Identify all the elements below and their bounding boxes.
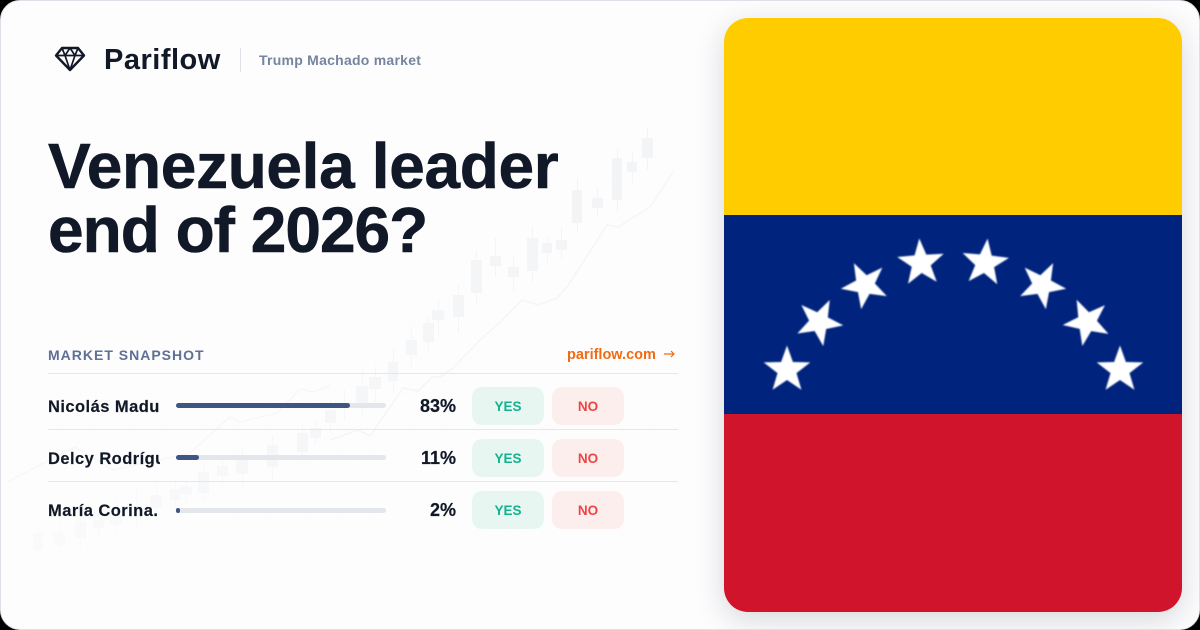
percentage: 2% xyxy=(430,500,456,520)
no button: NO xyxy=(578,451,598,466)
percentage: 11% xyxy=(421,448,456,468)
panel: Venezuela flag xyxy=(724,18,1182,612)
link arrow xyxy=(664,350,675,358)
title: Venezuela leader xyxy=(48,130,558,202)
yes button: YES xyxy=(494,399,522,414)
row dividers xyxy=(48,373,678,482)
probability bar xyxy=(176,455,386,460)
no button: NO xyxy=(578,399,598,414)
no button xyxy=(552,491,624,529)
market snapshot label: MARKET SNAPSHOT xyxy=(48,347,205,363)
title: end of 2026? xyxy=(48,194,427,266)
yes button xyxy=(472,491,544,529)
row: Delcy Rodríguez xyxy=(48,439,624,477)
row: Nicolás Maduro xyxy=(48,387,624,425)
probability bar xyxy=(176,508,386,513)
yes button xyxy=(472,439,544,477)
no button xyxy=(552,387,624,425)
candidate name: María Corina. xyxy=(48,502,158,520)
no button xyxy=(552,439,624,477)
header divider xyxy=(240,48,241,72)
yes button: YES xyxy=(494,503,522,518)
site link: pariflow.com xyxy=(567,347,656,363)
logo: diamond icon xyxy=(54,46,86,72)
market subtitle: Trump Machado market xyxy=(259,52,421,68)
no button: NO xyxy=(578,503,598,518)
yes button: YES xyxy=(494,451,522,466)
background candlestick chart xyxy=(330,128,673,440)
probability bar xyxy=(176,403,386,408)
yes button xyxy=(472,387,544,425)
title xyxy=(48,130,558,266)
row: María Corina xyxy=(48,491,624,529)
percentage: 83% xyxy=(420,396,456,416)
logo wordmark: Pariflow xyxy=(104,44,221,76)
